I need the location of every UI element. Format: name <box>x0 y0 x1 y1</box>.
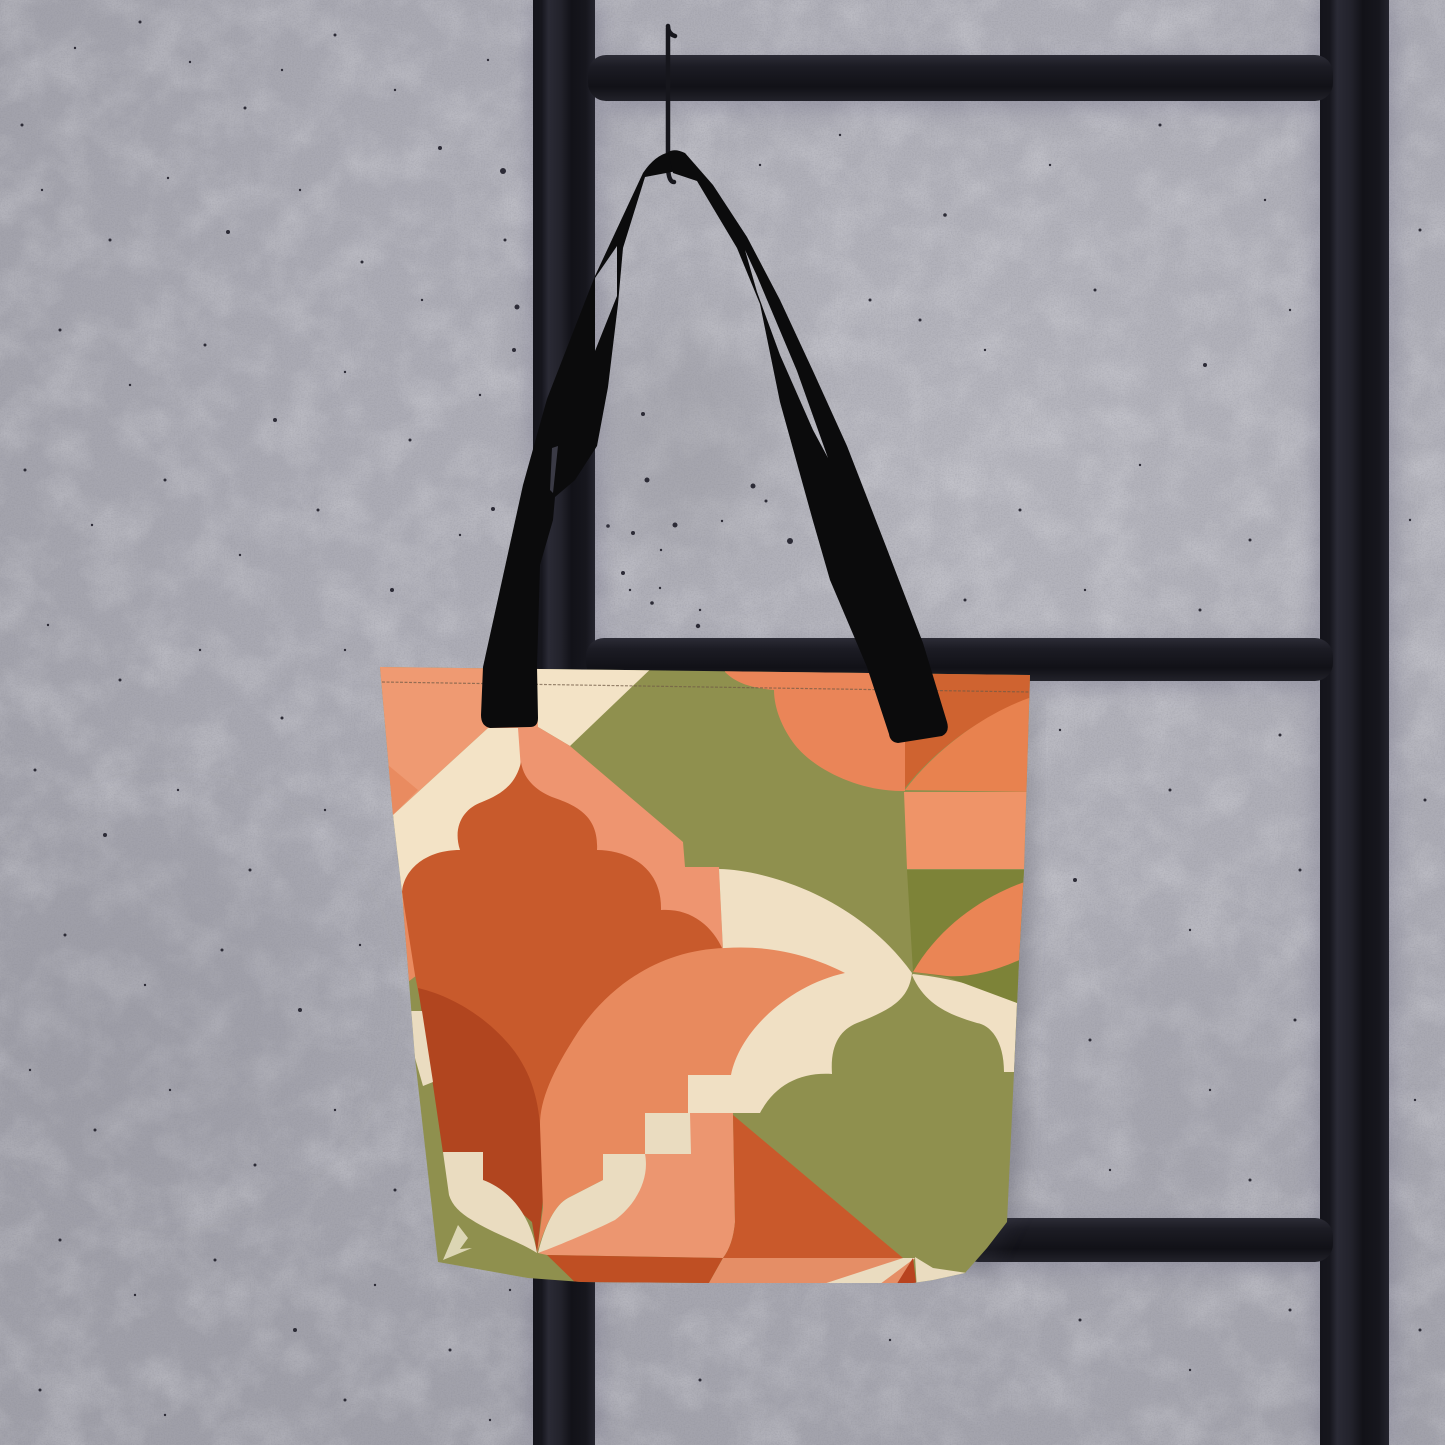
left handle straps <box>481 152 682 728</box>
left peach strip <box>402 892 416 982</box>
base olive <box>370 660 1040 1290</box>
cream arch and stair band <box>688 869 912 1113</box>
lower right cream petal <box>538 1154 646 1253</box>
bottom peach band <box>705 1258 903 1290</box>
lower left cream petal <box>443 1152 537 1253</box>
hook <box>668 26 675 182</box>
orange dome <box>402 762 722 1124</box>
bottom cream sliver <box>805 1258 915 1290</box>
ladder rail: left <box>533 0 595 1445</box>
dark orange lower dome <box>418 988 543 1253</box>
ladder rung: top <box>588 55 1333 101</box>
bottom small orange <box>893 1258 917 1290</box>
top-left peach <box>375 660 540 815</box>
top stitching <box>382 682 1030 692</box>
right peach panel <box>904 792 1035 869</box>
ladder rail: right <box>1320 0 1389 1445</box>
ladder rung: bottom <box>960 1218 1333 1262</box>
left cream sliver <box>410 1011 433 1086</box>
bottom orange band <box>547 1255 723 1290</box>
right handle straps <box>668 150 948 743</box>
right dark green panel <box>907 870 1035 1005</box>
top cream patch <box>537 668 650 746</box>
ladder shadow <box>528 0 1396 1445</box>
ladder <box>533 0 1389 1445</box>
bag body <box>370 660 1040 1290</box>
bag shadow <box>975 700 1034 1270</box>
top right dark orange <box>905 660 1035 788</box>
top right orange leaf <box>905 696 1035 792</box>
orange triangle <box>723 1115 903 1258</box>
left cream diagonal band <box>393 728 525 905</box>
handles <box>481 150 948 743</box>
top-left darker peach <box>388 765 418 815</box>
stair square <box>645 1113 691 1154</box>
ladder rung: middle <box>586 638 1333 681</box>
right peach leaf <box>913 880 1030 976</box>
small cream fold arrow <box>443 1225 472 1260</box>
peach leaf <box>537 947 845 1253</box>
bottom small peach <box>872 1258 915 1290</box>
handle gap over rail <box>550 446 558 493</box>
peach lower panel <box>538 1113 735 1258</box>
right cream petal <box>912 974 1017 1072</box>
top right peach half circle <box>725 660 905 791</box>
bottom cream corner <box>915 1257 967 1290</box>
peach surround of dome <box>518 727 723 950</box>
